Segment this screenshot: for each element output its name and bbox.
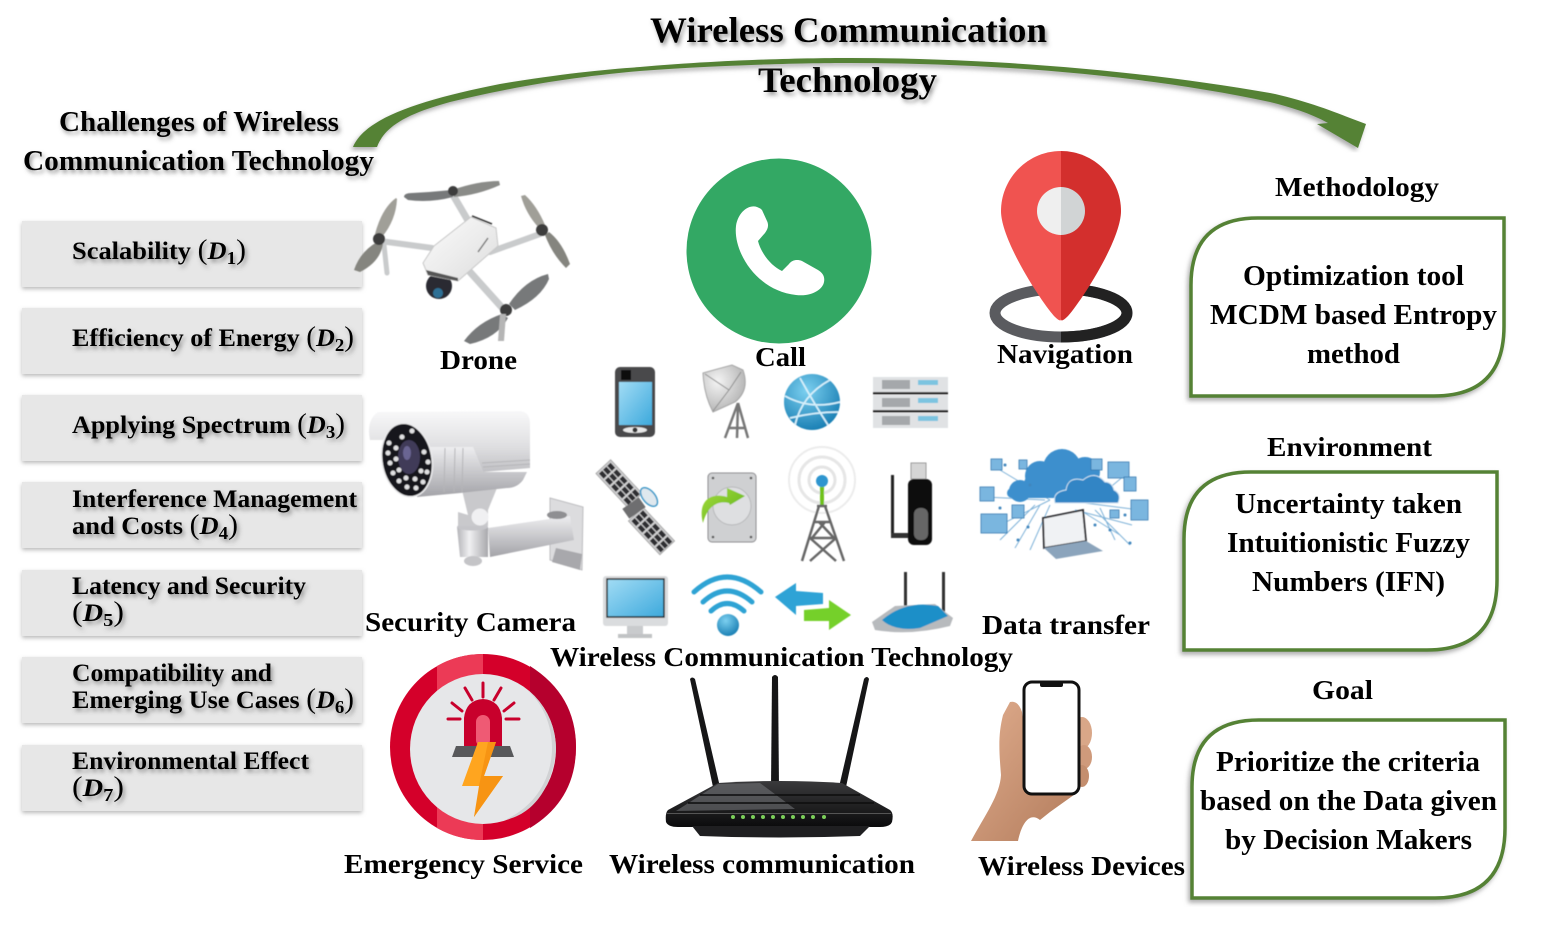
challenge D1: Scalability (D xyxy=(72,235,226,266)
label: security camera: Security Camera xyxy=(365,607,577,637)
icon: drone xyxy=(354,181,570,344)
panel: environment: Intuitionistic Fuzzy xyxy=(1227,528,1470,559)
label: emergency service: Emergency Service xyxy=(344,849,583,879)
challenge D1: ) xyxy=(236,235,246,266)
challenge D7: Environmental Effect xyxy=(72,748,310,775)
panel: methodology xyxy=(1191,218,1504,396)
challenge D4: Interference Management xyxy=(72,486,358,513)
panel: environment: Numbers (IFN) xyxy=(1252,567,1445,598)
panel: environment: Uncertainty taken xyxy=(1235,489,1462,520)
challenge D7 xyxy=(22,745,362,811)
heading: goal: Goal xyxy=(1312,675,1374,705)
icon: usb dongle xyxy=(891,463,932,545)
challenge D5: Latency and Security xyxy=(72,573,307,600)
challenge D5: ) xyxy=(113,597,124,628)
icon: globe xyxy=(784,374,840,430)
heading: challenges xyxy=(23,107,374,177)
challenge D6: Emerging Use Cases (D xyxy=(72,684,334,715)
challenge D6 xyxy=(22,657,362,723)
heading: challenges: Communication Technology xyxy=(23,146,374,177)
challenge D3 xyxy=(22,395,362,461)
challenge D5: (D xyxy=(72,597,101,628)
challenge D4: and Costs (D xyxy=(72,510,218,541)
challenge D7: 7 xyxy=(103,785,113,805)
panel: challenges list xyxy=(22,221,362,811)
challenge D6: Compatibility and xyxy=(72,660,272,687)
icon: satellite xyxy=(596,460,674,555)
panel: methodology: MCDM based Entropy xyxy=(1210,300,1497,331)
challenge D7: (D xyxy=(72,772,101,803)
challenge D2: 2 xyxy=(335,335,344,355)
icon: security camera xyxy=(369,411,583,570)
challenge D6: ) xyxy=(344,684,354,715)
challenge D5: 5 xyxy=(103,610,113,630)
label: wireless communication: Wireless communication xyxy=(609,849,915,879)
panel: goal: by Decision Makers xyxy=(1225,825,1472,856)
icon: emergency alarm xyxy=(390,654,576,840)
heading: challenges: Challenges of Wireless xyxy=(59,107,339,138)
challenge D3: Applying Spectrum (D xyxy=(72,409,325,440)
icon group: wireless technology xyxy=(596,365,953,638)
challenge D3: ) xyxy=(335,409,345,440)
title: Wireless Communication xyxy=(650,10,1047,50)
label: wireless devices: Wireless Devices xyxy=(978,851,1185,881)
challenge D1: 1 xyxy=(227,248,236,268)
icon: wireless router xyxy=(666,675,893,838)
challenge D2: Efficiency of Energy (D xyxy=(72,322,334,353)
label: wireless communication technology: Wireless Communication Technology xyxy=(550,642,1014,672)
challenge D4: ) xyxy=(228,510,238,541)
icon: antenna tower xyxy=(789,447,855,561)
heading: methodology: Methodology xyxy=(1275,172,1440,202)
title: Technology xyxy=(758,60,937,100)
icon: call xyxy=(686,158,872,344)
challenge D3: 3 xyxy=(326,422,335,442)
challenge D5 xyxy=(22,570,362,636)
challenge D7: ) xyxy=(113,772,124,803)
challenge D1 xyxy=(22,221,362,287)
icon: hard disk xyxy=(702,473,756,542)
panel: environment xyxy=(1184,472,1497,650)
icon: wifi xyxy=(694,577,761,636)
label: drone: Drone xyxy=(440,345,517,375)
panel: methodology: method xyxy=(1307,339,1400,370)
icon: hand holding phone xyxy=(971,682,1092,841)
challenge D2: ) xyxy=(344,322,354,353)
label: data transfer: Data transfer xyxy=(982,610,1150,640)
heading: environment: Environment xyxy=(1267,432,1432,462)
challenge D6: 6 xyxy=(335,697,344,717)
icon: wifi router xyxy=(872,572,953,632)
label: navigation: Navigation xyxy=(997,339,1133,369)
panel: goal: based on the Data given xyxy=(1200,786,1497,817)
panel: goal xyxy=(1192,720,1505,898)
wall mount xyxy=(550,498,583,570)
challenge D4: 4 xyxy=(219,523,228,543)
icon: mobile phone xyxy=(615,367,655,437)
icon: transfer arrows xyxy=(775,583,851,630)
icon: desktop monitor xyxy=(603,576,668,638)
challenge D2 xyxy=(22,308,362,374)
panel: methodology: Optimization tool xyxy=(1243,261,1464,292)
title xyxy=(650,10,1047,100)
panel: goal: Prioritize the criteria xyxy=(1216,747,1480,778)
icon: cloud data transfer xyxy=(980,449,1148,559)
icon: satellite dish xyxy=(703,365,748,438)
label: call: Call xyxy=(755,342,807,372)
challenge D4 xyxy=(22,482,362,548)
camera body xyxy=(417,447,527,497)
icon: server rack xyxy=(873,377,948,428)
icon: navigation pin xyxy=(995,151,1127,337)
arrow: curved green arc xyxy=(353,58,1366,148)
